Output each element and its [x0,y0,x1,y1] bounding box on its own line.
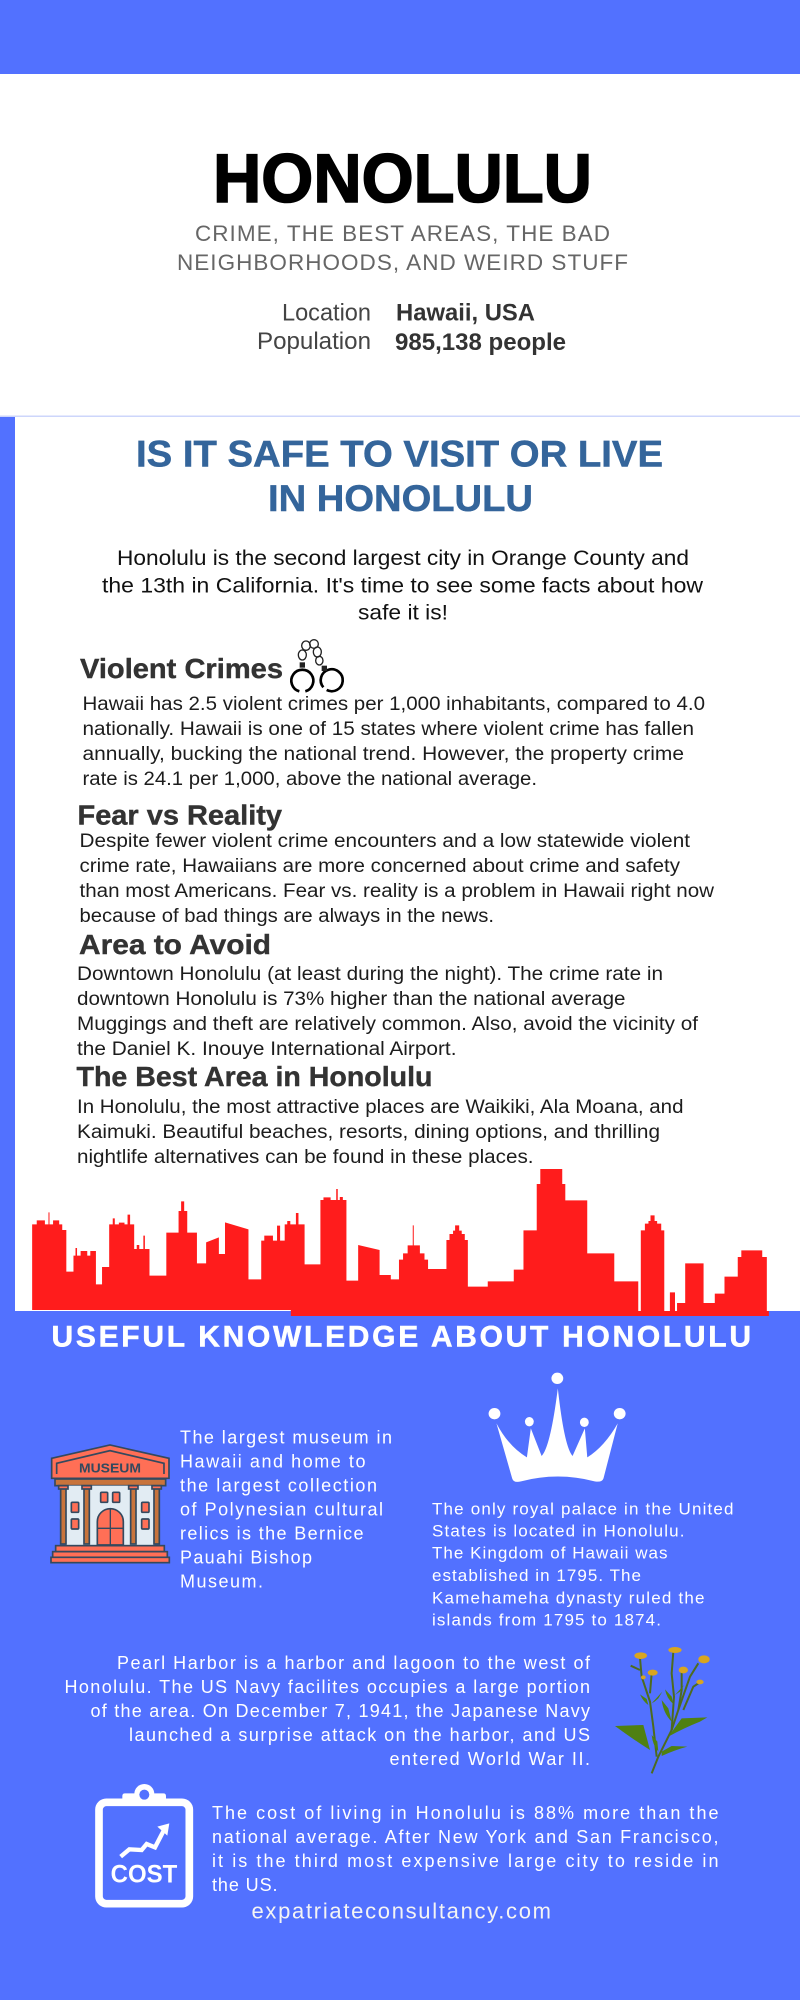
text: violent crimes: annually, bucking the national trend. However, the property crime [82,744,684,765]
text: museum: relics is the Bernice [180,1523,364,1543]
text: cost of living: it is the third most expensive large city to reside in [212,1851,718,1871]
heading: violent crimes: Violent Crimes [80,653,283,684]
icon: crown [489,1373,626,1482]
subtitle: NEIGHBORHOODS, AND WEIRD STUFF [177,250,628,275]
text: cost of living: national average. After New York and San Francisco, [212,1827,718,1847]
text: best area: Kaimuki. Beautiful beaches, resorts, dining options, and thrilling [77,1122,660,1143]
population row: 985,138 people [395,329,566,356]
population row [257,328,566,356]
icon: plant [615,1647,710,1773]
text: cost of living [212,1803,718,1895]
footer website: expatriateconsultancy.com [252,1898,551,1924]
intro text: the 13th in California. It's time to see some facts about how [102,574,704,598]
text: fear vs reality [80,831,714,927]
text: pearl harbor: launched a surprise attack on the harbor, and US [129,1725,590,1745]
text: royal palace: islands from 1795 to 1874. [432,1610,661,1629]
heading: best area: The Best Area in Honolulu [76,1061,432,1092]
text: area to avoid: Muggings and theft are relatively common. Also, avoid the vicinity of [77,1014,699,1035]
text: royal palace [432,1499,734,1629]
text: best area: nightlife alternatives can be found in these places. [77,1147,534,1168]
population row: Population [257,328,371,355]
icon: museum: MUSEUM [79,1461,141,1475]
text: fear vs reality: crime rate, Hawaiians are more concerned about crime and safety [80,856,681,877]
text: best area: In Honolulu, the most attractive places are Waikiki, Ala Moana, and [77,1097,684,1118]
title: HONOLULU [213,140,592,217]
text: area to avoid: downtown Honolulu is 73% higher than the national average [77,989,626,1010]
text: museum: The largest museum in [180,1427,392,1447]
text: royal palace: established in 1795. The [432,1566,641,1585]
text: violent crimes: Hawaii has 2.5 violent crimes per 1,000 inhabitants, compared to 4.0 [82,694,705,715]
text: museum: Hawaii and home to [180,1451,366,1471]
text: fear vs reality: because of bad things are always in the news. [80,906,494,927]
text: pearl harbor [64,1653,591,1769]
text: royal palace: The Kingdom of Hawaii was [432,1543,668,1562]
text: violent crimes [82,694,705,790]
intro text: safe it is! [358,602,448,624]
text: royal palace: States is located in Honolulu. [432,1521,684,1540]
text: pearl harbor: entered World War II. [390,1749,590,1769]
text: cost of living: The cost of living in Honolulu is 88% more than the [212,1803,718,1823]
text: museum: the largest collection [180,1475,377,1495]
text: cost of living: the US. [212,1875,278,1895]
heading: is it safe: IN HONOLULU [268,478,533,519]
text: fear vs reality: than most Americans. Fear vs. reality is a problem in Hawaii right now [80,881,714,902]
icon: museum [51,1445,169,1563]
text: pearl harbor: Pearl Harbor is a harbor and lagoon to the west of [117,1653,591,1673]
heading: is it safe [136,434,663,519]
panel: title header [0,74,800,416]
text: museum: of Polynesian cultural [180,1499,383,1519]
intro text [102,547,704,624]
text: violent crimes: rate is 24.1 per 1,000, above the national average. [82,769,537,790]
text: area to avoid [77,964,699,1060]
location row: Location [282,300,371,326]
text: best area [77,1097,684,1168]
text: pearl harbor: Honolulu. The US Navy facilites occupies a large portion [64,1677,590,1697]
text: violent crimes: nationally. Hawaii is one of 15 states where violent crime has fallen [82,719,694,740]
subtitle [177,221,628,275]
location row: Hawaii, USA [396,300,535,326]
icon: cost clipboard [99,1784,189,1904]
text: museum: Museum. [180,1571,263,1591]
heading: useful knowledge: USEFUL KNOWLEDGE ABOUT HONOLULU [52,1320,751,1354]
heading: is it safe: IS IT SAFE TO VISIT OR LIVE [136,434,663,474]
icon: cost clipboard: COST [111,1860,178,1888]
panel: safety section [0,416,800,1311]
text: royal palace: Kamehameha dynasty ruled the [432,1589,704,1608]
text: royal palace: The only royal palace in the United [432,1499,734,1518]
subtitle: CRIME, THE BEST AREAS, THE BAD [195,221,610,246]
text: pearl harbor: of the area. On December 7, 1941, the Japanese Navy [90,1701,590,1721]
skyline [32,1169,769,1316]
text: area to avoid: the Daniel K. Inouye International Airport. [77,1039,457,1060]
text: museum [180,1427,392,1591]
icon: handcuffs [291,640,343,691]
intro text: Honolulu is the second largest city in Orange County and [117,547,689,570]
heading: area to avoid: Area to Avoid [79,929,271,960]
text: area to avoid: Downtown Honolulu (at least during the night). The crime rate in [77,964,663,985]
text: fear vs reality: Despite fewer violent crime encounters and a low statewide violent [80,831,691,852]
text: museum: Pauahi Bishop [180,1547,312,1567]
location row [282,300,535,326]
heading: fear vs reality: Fear vs Reality [78,800,282,830]
